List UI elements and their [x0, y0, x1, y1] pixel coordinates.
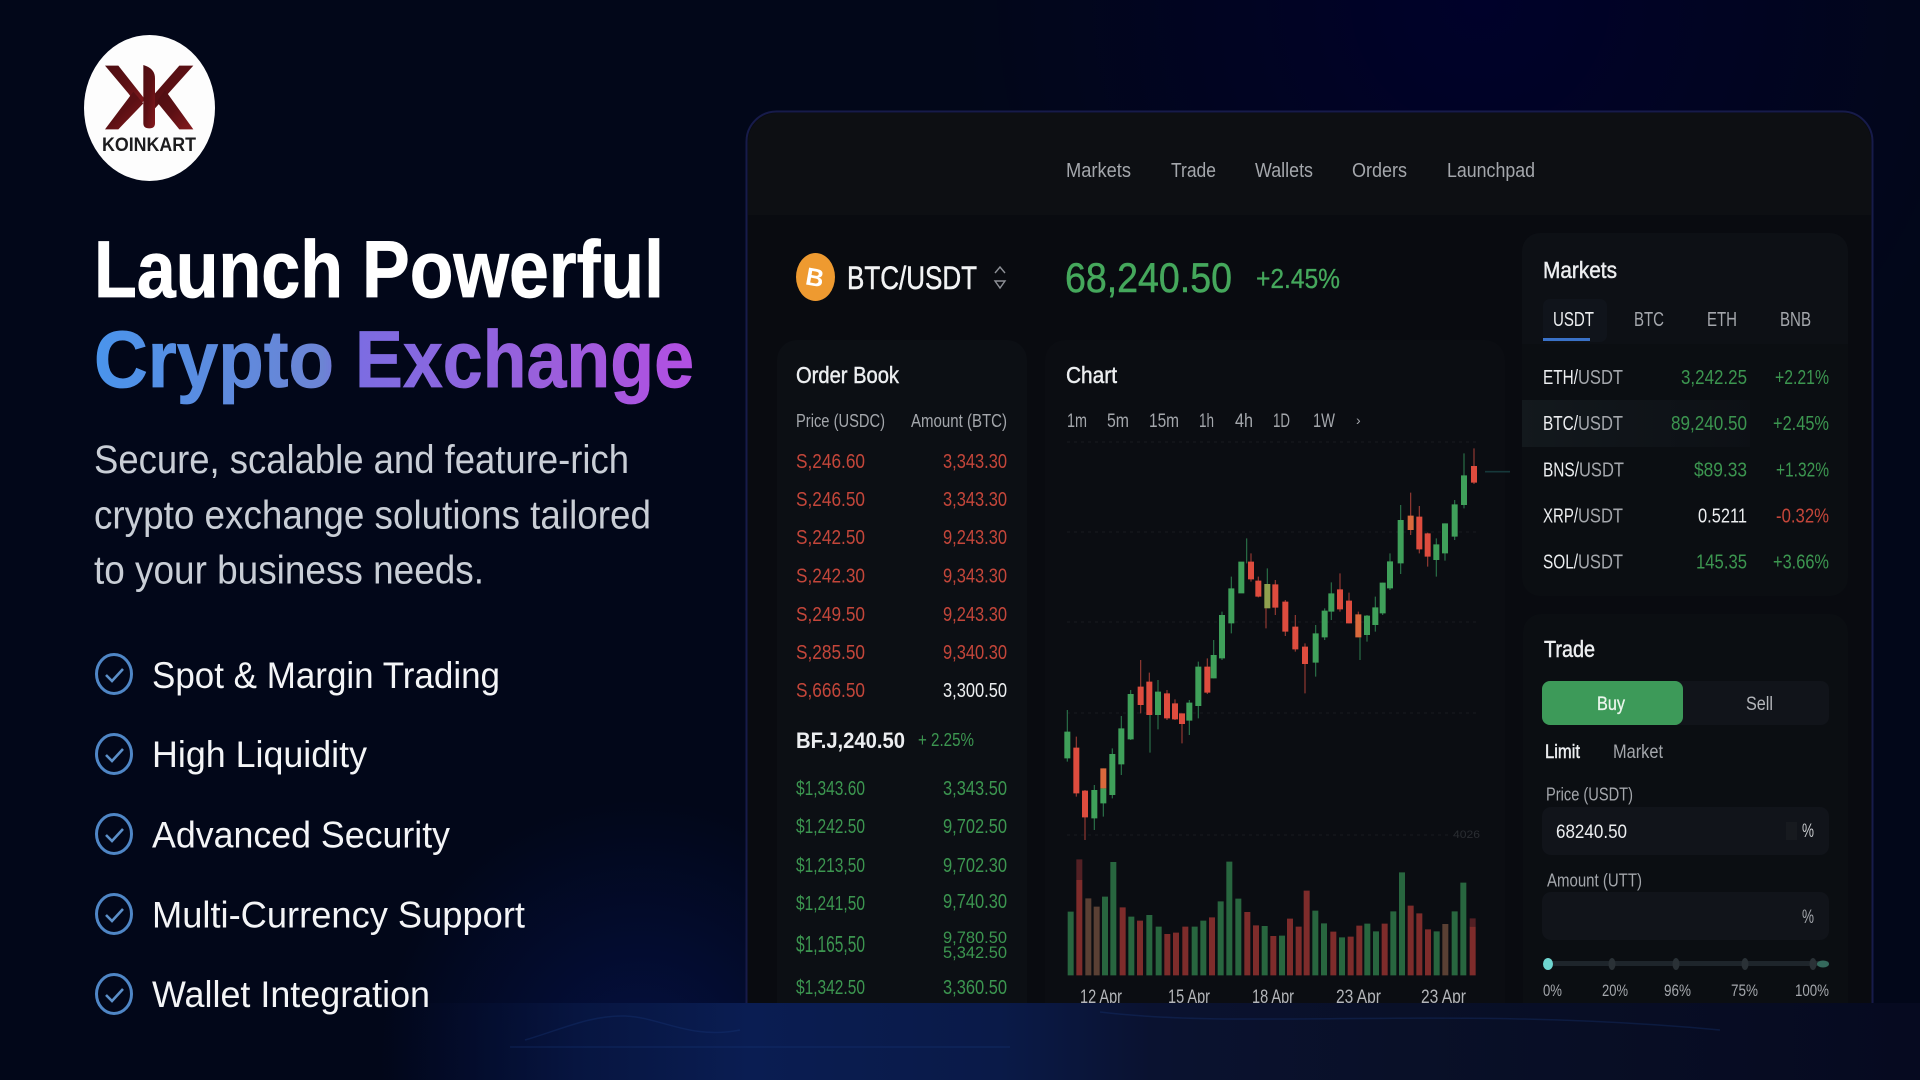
timeframe tabs: 1W: [1313, 411, 1335, 432]
currency tabs: BNB: [1780, 309, 1811, 331]
navigation bar: Wallets: [1255, 160, 1313, 182]
buy orders: 9,780.50: [943, 928, 1007, 947]
description: Secure, scalable and feature-rich: [94, 438, 629, 482]
order type tabs: Market: [1613, 742, 1664, 763]
amount input: Amount (UTT): [1547, 870, 1642, 890]
title: Launch: [94, 225, 343, 315]
sell orders: S,285.50: [796, 642, 865, 664]
mid price: + 2.25%: [918, 730, 974, 750]
amount input: [1542, 870, 1829, 940]
market row: BNS: $89.33: [1694, 460, 1747, 482]
chart heading: Chart: [1066, 362, 1118, 388]
logo: [84, 35, 215, 181]
market row: XRP: -0.32%: [1776, 506, 1829, 528]
percentage slider: [1543, 958, 1829, 970]
panel: trade form: [1523, 614, 1848, 1044]
buy orders: $1,242.50: [796, 816, 865, 838]
feature: multi-currency support: Multi-Currency Support: [152, 894, 526, 936]
timeframe tabs: ›: [1356, 412, 1361, 428]
market row: SOL: USDT: [1578, 552, 1623, 574]
timeframe tabs: 1m: [1067, 411, 1087, 432]
market row: ETH: +2.21%: [1775, 367, 1829, 389]
navigation bar: Launchpad: [1447, 160, 1535, 182]
panel: markets: [1522, 233, 1848, 596]
market row: SOL: [1543, 552, 1829, 574]
date axis: [1080, 987, 1467, 1008]
markets heading: Markets: [1543, 257, 1617, 283]
sell orders: S,246.50: [796, 489, 865, 511]
sell orders: 3,300.50: [943, 680, 1007, 702]
market row: BNS: USDT: [1579, 460, 1624, 482]
date axis: 23 Apr: [1336, 987, 1382, 1008]
market row: ETH: USDT: [1578, 367, 1623, 389]
market row: ETH: ETH/: [1543, 367, 1578, 389]
market row: BNS: +1.32%: [1776, 460, 1829, 482]
order book heading: Order Book: [796, 362, 899, 388]
buy orders: 3,343.50: [943, 778, 1007, 800]
buy orders: $1,342.50: [796, 977, 865, 999]
bottom glow band: [0, 1003, 1920, 1080]
timeframe tabs: 1h: [1199, 411, 1214, 432]
market row: SOL: +3.66%: [1773, 552, 1829, 574]
buy and sell toggle: Sell: [1746, 694, 1773, 715]
buy and sell toggle: Buy: [1597, 694, 1625, 715]
buy orders: 9,740.30: [943, 891, 1007, 913]
price input: 68240.50: [1556, 822, 1627, 843]
buy and sell toggle: [1542, 681, 1829, 725]
market row: XRP: XRP/: [1543, 506, 1578, 528]
sell orders: 9,340.30: [943, 642, 1007, 664]
icon: bitcoin coin: B: [804, 263, 826, 293]
title: Crypto: [94, 315, 334, 405]
panel: exchange dashboard: [746, 112, 1872, 1072]
logo wordmark: KOINKART: [102, 135, 196, 156]
sell orders: S,249.50: [796, 604, 865, 626]
currency tabs: ETH: [1707, 309, 1737, 331]
description: [94, 438, 651, 592]
market row: ETH: 3,242.25: [1681, 367, 1747, 389]
order type tabs: [1545, 742, 1664, 763]
feature: spot and margin trading: Spot & Margin Trading: [152, 655, 500, 696]
amount input: %: [1802, 907, 1814, 928]
market row: BTC: [1543, 413, 1829, 435]
buy orders: $1,165,50: [796, 931, 865, 957]
price input: %: [1802, 821, 1814, 842]
mid price: [796, 728, 974, 753]
buy orders: 9,702.30: [943, 855, 1007, 877]
column headers: Amount (BTC): [911, 411, 1007, 431]
navigation bar: [1066, 160, 1535, 182]
sell orders: S,246.60: [796, 451, 865, 473]
currency tabs: BTC: [1634, 309, 1664, 331]
sell orders: 9,243.30: [943, 604, 1007, 626]
column headers: Price (USDC): [796, 411, 885, 431]
timeframe tabs: 1D: [1273, 411, 1290, 432]
market row: BNS: BNS/: [1543, 460, 1579, 482]
market row: BNS: [1543, 460, 1829, 482]
slider labels: 0%: [1543, 981, 1562, 1000]
sell orders: 3,343.30: [943, 489, 1007, 511]
order type tabs: Limit: [1545, 742, 1581, 763]
slider labels: 96%: [1664, 981, 1691, 1000]
sell orders: 9,343.30: [943, 566, 1007, 588]
date axis: 15 Apr: [1168, 987, 1211, 1008]
trade heading: Trade: [1544, 636, 1595, 662]
description: to your business needs.: [94, 548, 484, 592]
feature: advanced security: Advanced Security: [152, 814, 450, 856]
current price and change: 68,240.50: [1065, 254, 1232, 301]
buy orders: 3,360.50: [943, 977, 1007, 999]
buy orders: [796, 778, 1007, 999]
market row: BTC: BTC/: [1543, 413, 1578, 435]
panel: order book: [777, 340, 1027, 1040]
icon: bitcoin coin: [796, 253, 835, 301]
sell orders: S,242.30: [796, 566, 865, 588]
currency tabs: USDT: [1553, 309, 1594, 331]
logo mark: [105, 65, 193, 129]
panel: price chart: [1045, 340, 1510, 1040]
feature list: [96, 654, 526, 1015]
date axis: 23 Apr: [1421, 987, 1467, 1008]
date axis: 12 Apr: [1080, 987, 1123, 1008]
sell orders: S,242.50: [796, 527, 865, 549]
axis value: 4026: [1453, 829, 1480, 841]
sell orders: S,666.50: [796, 680, 865, 702]
current price and change: [1065, 254, 1340, 301]
timeframe tabs: 5m: [1107, 411, 1129, 432]
title: Exchange: [355, 315, 694, 405]
price input: [1542, 784, 1829, 855]
navigation bar: Trade: [1171, 160, 1216, 182]
market row: SOL: SOL/: [1543, 552, 1578, 574]
date axis: 18 Apr: [1252, 987, 1295, 1008]
description: crypto exchange solutions tailored: [94, 494, 651, 538]
current price and change: +2.45%: [1256, 263, 1340, 294]
slider labels: 75%: [1731, 981, 1758, 1000]
title: Powerful: [362, 225, 664, 315]
price input: Price (USDT): [1546, 784, 1633, 804]
slider labels: [1543, 981, 1829, 1000]
navigation bar: Markets: [1066, 160, 1131, 182]
market row: XRP: USDT: [1578, 506, 1623, 528]
sell orders: 3,343.30: [943, 451, 1007, 473]
volume bars: [1071, 859, 1473, 975]
market row: BTC: USDT: [1578, 413, 1623, 435]
slider labels: 100%: [1795, 981, 1829, 1000]
timeframe tabs: [1067, 411, 1361, 432]
timeframe tabs: 4h: [1235, 411, 1253, 432]
market row: SOL: 145.35: [1696, 552, 1747, 574]
candlestick chart: [1067, 448, 1510, 840]
buy orders: $1,213,50: [796, 855, 865, 877]
column headers: [796, 411, 1007, 431]
market row: BTC: +2.45%: [1773, 413, 1829, 435]
buy orders: $1,241,50: [796, 893, 865, 915]
mid price: BF.J,240.50: [796, 728, 905, 753]
title: [94, 225, 694, 405]
market row: XRP: [1543, 506, 1829, 528]
sell orders: 9,243.30: [943, 527, 1007, 549]
sell orders: [796, 451, 1007, 702]
feature: high liquidity: High Liquidity: [152, 734, 367, 775]
currency tabs: [1543, 299, 1811, 342]
buy orders: 5,342.50: [943, 943, 1007, 962]
feature: wallet integration: Wallet Integration: [152, 974, 430, 1015]
market row: XRP: 0.5211: [1698, 506, 1747, 528]
navigation bar: Orders: [1352, 160, 1407, 182]
buy orders: $1,343.60: [796, 778, 865, 800]
buy orders: 9,702.50: [943, 816, 1007, 838]
market row: BTC: 89,240.50: [1671, 413, 1747, 435]
timeframe tabs: 15m: [1149, 411, 1179, 432]
trading pair selector: BTC/USDT: [847, 260, 977, 296]
market row: ETH: [1543, 367, 1829, 389]
slider labels: 20%: [1602, 981, 1628, 1000]
